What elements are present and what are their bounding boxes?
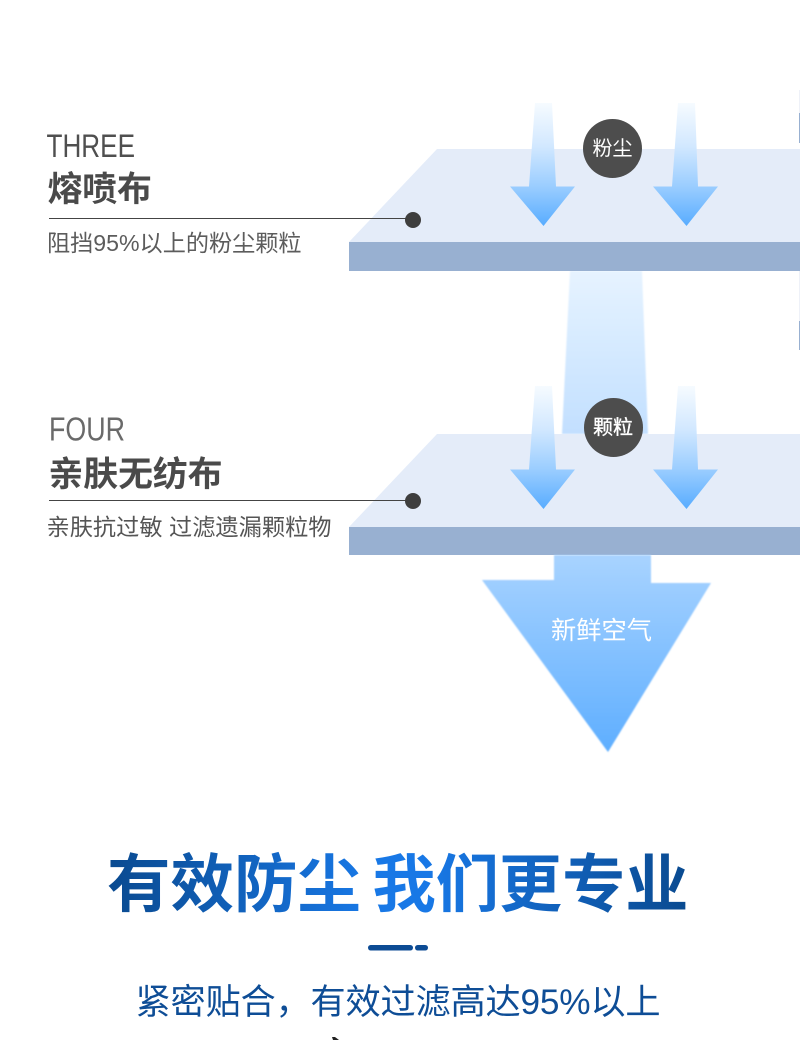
panel: melt-blown layer [349,149,800,271]
heading: skin-friendly non-woven: 亲肤无纺布 [48,455,222,494]
arrow: left dust arrow, upper layer [510,103,575,226]
badge: particles: 颗粒 [593,416,633,439]
label: THREE: THREE [46,128,135,164]
air beam between layers [562,271,648,434]
right edge slivers [799,90,800,350]
arrow: left particle arrow, lower layer [510,386,575,509]
arrow: right particle arrow, lower layer [653,386,718,509]
badge: dust [583,119,642,178]
label: FOUR: FOUR [49,410,125,448]
text: blocks 95% dust: 阻挡95%以上的粉尘颗粒 [47,230,302,256]
title: 有效防尘 [107,850,361,920]
label: fresh air: 新鲜空气 [551,617,652,645]
subtitle: 紧密贴合，有效过滤高达95%以上 [136,983,660,1022]
callout line and dot [49,493,421,509]
arrow: right dust arrow, upper layer [653,103,718,226]
callout line and dot [49,212,421,228]
panel: skin-friendly layer [349,434,800,555]
badge: dust: 粉尘 [592,137,632,160]
block: THREE melt-blown description [46,128,421,256]
clipped next-line glyph fragment [332,1037,339,1040]
heading: melt-blown fabric: 熔喷布 [48,170,152,209]
divider [368,945,428,950]
title [107,850,688,920]
block: FOUR skin-friendly description [46,410,421,540]
text: anti-allergy filtering: 亲肤抗过敏 过滤遗漏颗粒物 [46,514,332,540]
arrow: fresh air output [482,555,711,752]
badge: particles [584,398,643,457]
title: 我们更专业 [372,850,688,920]
